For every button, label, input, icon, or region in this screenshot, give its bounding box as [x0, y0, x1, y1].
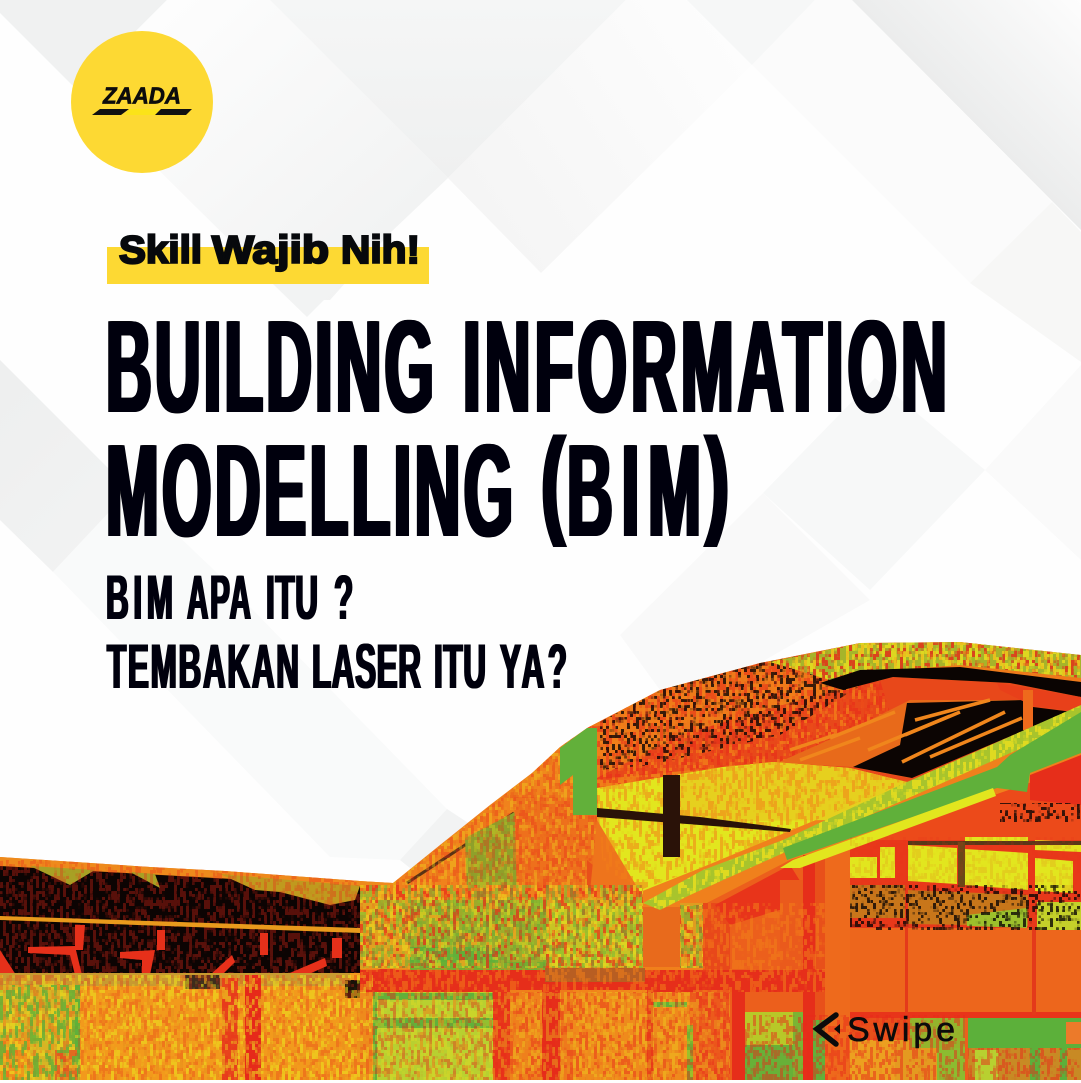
title: (: [541, 414, 566, 549]
logo road stripe: [92, 109, 192, 115]
title: [106, 292, 947, 564]
lit yellow interior with cross beam: [590, 760, 907, 895]
green column at gable top: [560, 728, 597, 815]
title: MODELLING: [106, 416, 513, 564]
subtitle questions: [106, 562, 567, 702]
subtitle questions: ITU: [266, 562, 318, 633]
subtitle questions: BIM: [106, 562, 173, 633]
roof underside: [587, 640, 1081, 790]
gable wall with arch rib: [393, 737, 600, 885]
ceiling red trusses: [0, 925, 395, 973]
title: BIM: [567, 416, 701, 564]
laser scan point-cloud of building: [0, 630, 1081, 1080]
yellow windows: [850, 837, 1081, 893]
title: INFORMATION: [463, 292, 947, 440]
right lower facade: [703, 850, 1081, 1080]
ceiling beam: [0, 916, 360, 933]
cross beam: [597, 775, 791, 857]
scan speckle texture: [0, 800, 1081, 1080]
swipe hint: Swipe: [847, 1011, 955, 1049]
tagline: Skill Wajib Nih!: [107, 229, 429, 284]
speckled row: [850, 885, 1028, 926]
subtitle questions: ITU: [434, 631, 486, 702]
icon: left chevron: [817, 1015, 840, 1044]
subtitle questions: LASER: [312, 631, 421, 702]
subtitle questions: ?: [334, 562, 353, 633]
red horizontal girder: [360, 962, 825, 992]
left ceiling: dark: [0, 855, 395, 975]
title: BUILDING: [106, 292, 434, 440]
tagline: Skill Wajib Nih!: Wajib: [212, 229, 329, 272]
green diagonal beam: [643, 705, 1081, 910]
ground floor bays: [360, 990, 1081, 1080]
subtitle questions: APA: [187, 563, 251, 633]
left lower wall: [0, 973, 380, 1080]
logo: ZAADA yellow circle: [71, 31, 213, 173]
red area below beam: [877, 782, 1081, 840]
subtitle questions: TEMBAKAN: [107, 631, 299, 702]
tagline: Skill Wajib Nih!: Skill: [119, 229, 202, 272]
masonry block: [360, 885, 703, 969]
logo wordmark: ZAADA: [102, 82, 181, 108]
title: ): [705, 414, 729, 549]
subtitle questions: YA?: [500, 631, 567, 702]
window band: [850, 837, 1081, 930]
tagline: Skill Wajib Nih!: Nih!: [341, 229, 420, 272]
